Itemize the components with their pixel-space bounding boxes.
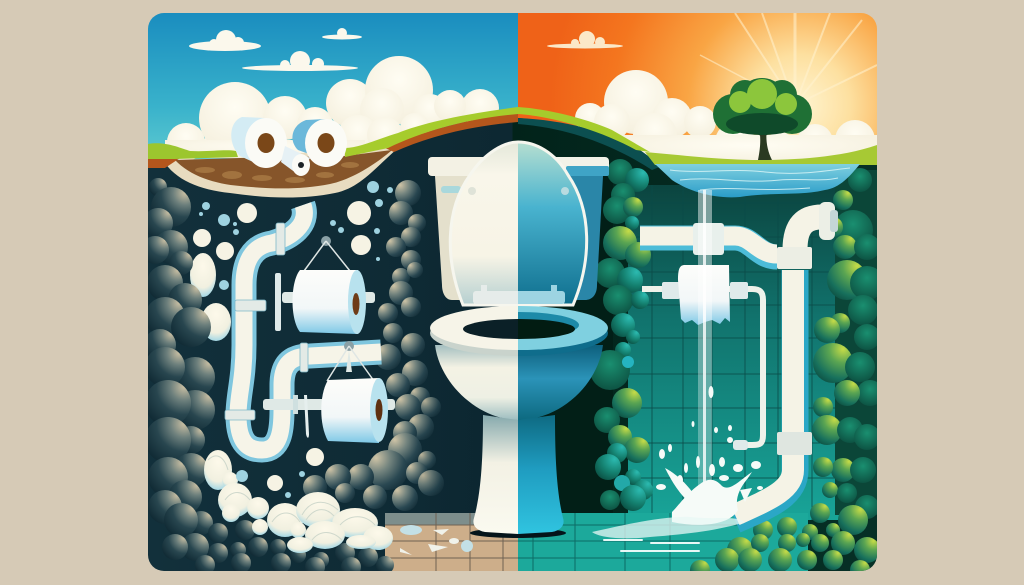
floor water [592, 517, 745, 552]
pipe collars right [777, 247, 812, 455]
icon: falling bubbles and tissue balls [193, 181, 393, 498]
roll small [281, 146, 310, 176]
soil [175, 150, 392, 188]
toilet roll holder one [275, 236, 375, 334]
toilet: base shadow [470, 528, 566, 538]
soil rim [163, 146, 398, 198]
water pool [655, 164, 860, 197]
panel: right sunset sky [518, 13, 877, 135]
seat hole [463, 319, 575, 339]
scene card [141, 13, 884, 580]
big clouds left [165, 56, 499, 161]
toilet rolls on ground [231, 117, 347, 176]
pedestal [518, 415, 564, 534]
water splash [656, 386, 763, 525]
pipe: left S-trap run [238, 205, 381, 450]
lid bolts [468, 187, 569, 195]
bowl [435, 345, 603, 420]
seat inner rim [459, 312, 579, 338]
panel: left sky [148, 13, 518, 160]
roll a [231, 117, 264, 162]
pipe joint upper [693, 223, 724, 255]
toilet roll holder two [263, 341, 395, 443]
thin supply pipe [642, 289, 763, 445]
seat lid [450, 142, 587, 305]
toilet: white half [428, 142, 608, 534]
panel: tiled wall [628, 185, 843, 520]
icon: tree [713, 78, 812, 160]
hinge [505, 285, 565, 304]
pipe flange [819, 202, 838, 240]
left wall rock blobs [141, 178, 394, 577]
seat hole [463, 319, 575, 339]
orange root edge [148, 113, 518, 168]
pedestal [473, 415, 518, 534]
small clouds left [189, 28, 362, 71]
seat lid [450, 142, 587, 305]
illustration [148, 13, 877, 571]
right shadow behind toilet [518, 165, 613, 513]
roll b [292, 119, 326, 154]
foam shells upper left [190, 253, 231, 341]
torn toilet roll right [678, 265, 730, 325]
waterfall [698, 190, 712, 495]
pipe: right upper run [640, 236, 777, 257]
grass right [645, 145, 877, 165]
tank lid [510, 157, 609, 176]
tank lever [441, 186, 461, 193]
sun rays [700, 13, 877, 105]
seat [430, 310, 608, 356]
tank lid [428, 157, 528, 176]
center-right green blobs [590, 159, 653, 511]
pipe collars left [225, 223, 308, 420]
right wall dark base [835, 170, 877, 515]
hinge [473, 285, 533, 304]
panel: floor right [518, 513, 808, 571]
right wall green blobs [812, 168, 884, 519]
small cloud right [547, 31, 623, 48]
pipe: right vertical run [735, 217, 822, 520]
grass left [148, 143, 238, 159]
foam shells lower [204, 450, 393, 553]
grass and soil bank [148, 107, 877, 198]
panel: floor left [385, 513, 518, 571]
tank body [435, 176, 518, 300]
seat [430, 310, 608, 356]
dark shadow behind toilet left [415, 387, 442, 490]
bowl [435, 345, 603, 420]
foam ribs [208, 456, 375, 540]
right dark bank [518, 118, 662, 170]
center-left rock blobs [303, 180, 444, 511]
floor debris [400, 525, 473, 555]
tank body [518, 176, 603, 300]
bottom right green blobs [690, 503, 877, 571]
big clouds right [575, 70, 877, 165]
holder ends [662, 282, 748, 450]
toilet: blue half [430, 142, 609, 534]
panel: underground base [148, 118, 877, 571]
